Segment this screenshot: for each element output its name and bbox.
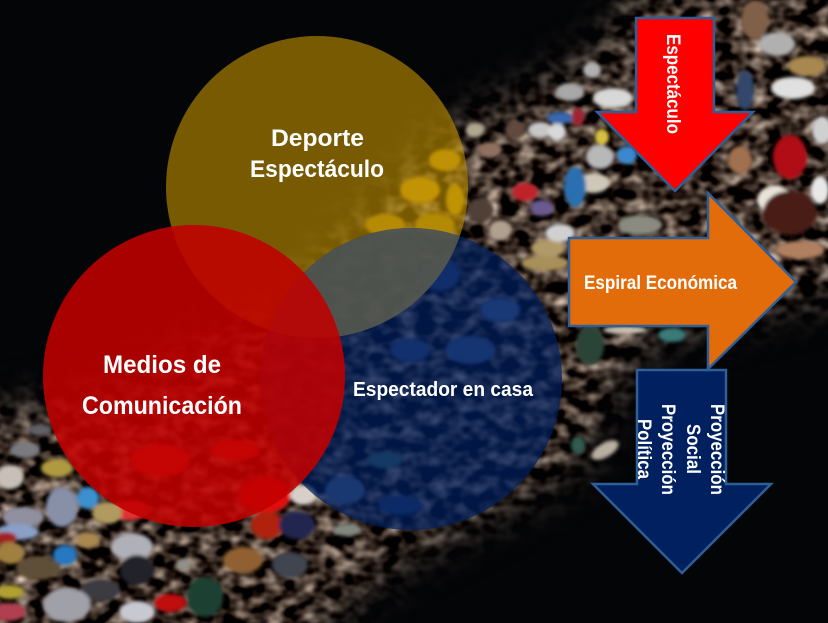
arrow text: Proyección Social Proyección Política: Social [682,424,703,474]
upper right spectators [577,173,609,193]
arrow: Espectáculo [597,18,753,191]
label: Espectador en casa: Espectador en casa [353,379,534,401]
arrow: Espiral Económica [569,193,796,369]
arrow text: Proyección Social Proyección Política [633,404,727,495]
arrow text: Proyección Social Proyección Política: Proyección [706,404,727,495]
arrow text: Proyección Social Proyección Política: Proyección [657,404,678,495]
label: Medios de Comunicación [82,351,242,420]
label: Deporte Espectáculo: Deporte [271,125,364,152]
label: Deporte Espectáculo: Espectáculo [250,156,384,183]
arrow text: Espiral Económica: Espiral Económica [584,273,737,294]
overlap: yellow and blue [304,228,460,336]
panel: Venn diagram [43,36,562,530]
label: Deporte Espectáculo [250,125,384,183]
arrow: Proyección [593,370,771,573]
lower left spectators [41,459,73,477]
under yellow circle [400,177,440,203]
label: Medios de Comunicación: Medios de [103,351,221,379]
circle: Medios de Comunicación [43,225,345,527]
circle: Espectador en casa [260,228,562,530]
under red circle [211,440,259,460]
label: Medios de Comunicación: Comunicación [82,392,242,420]
arrow text: Proyección Social Proyección Política: Política [633,419,654,479]
arrow text: Espectáculo: Espectáculo [662,34,683,134]
circle: Deporte Espectáculo [166,36,468,338]
under blue circle [480,298,520,322]
